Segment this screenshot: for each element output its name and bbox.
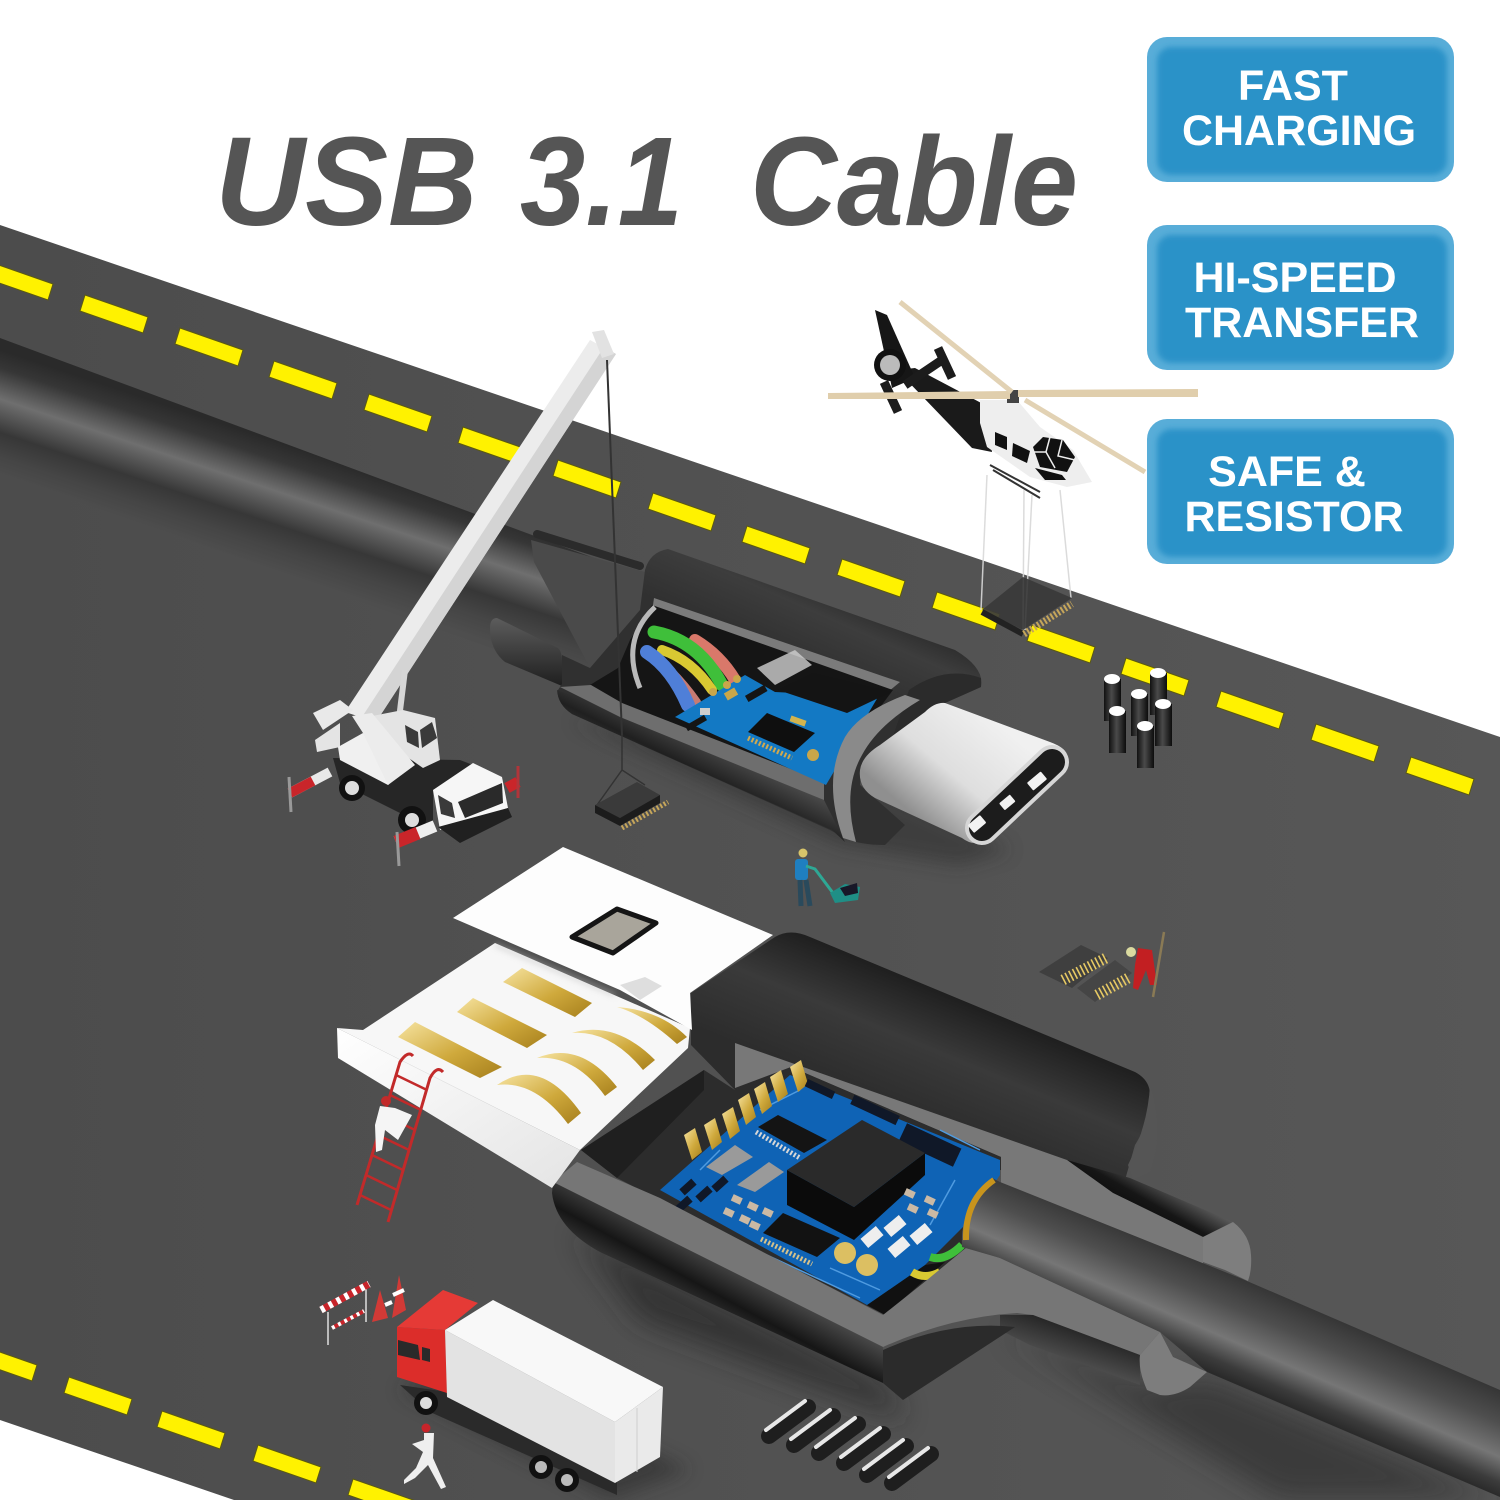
hoist rope (607, 360, 622, 735)
tail ring (874, 349, 906, 381)
operator cab windows (405, 725, 419, 748)
boom head (592, 330, 614, 358)
collar ring (833, 695, 920, 842)
cab top (397, 1290, 478, 1330)
curved contacts (497, 1075, 581, 1124)
white base top (337, 943, 690, 1150)
rotor hub (1007, 390, 1019, 403)
tail fin (875, 310, 915, 388)
rotor diagonal (900, 302, 1145, 472)
ladder with climber (357, 1054, 443, 1222)
small parts (685, 675, 819, 761)
opening (581, 1067, 1001, 1315)
collar end highlight (890, 674, 981, 745)
silver chip one (706, 1145, 753, 1175)
sling lines (981, 475, 1071, 630)
white pads (860, 1215, 933, 1258)
upper wall (735, 1043, 1203, 1270)
carried chip (982, 577, 1072, 630)
counterweight upper (313, 700, 353, 730)
ladder rungs (360, 1075, 427, 1210)
silver part (757, 650, 812, 685)
fuselage (980, 400, 1092, 487)
badge: fast charging: CHARGING (1182, 107, 1416, 155)
lower lobe (883, 1326, 1015, 1400)
box top (445, 1300, 663, 1422)
badge: fast charging: FAST (1238, 62, 1348, 110)
worker figure (1133, 948, 1157, 990)
wires end (930, 1245, 962, 1258)
cab window (398, 1340, 420, 1360)
truck shadow (400, 1360, 690, 1500)
cap slot (572, 909, 656, 953)
rear wheel (339, 775, 365, 801)
helicopter (828, 302, 1198, 634)
outrigger right (507, 782, 518, 788)
board traces (680, 1090, 980, 1298)
badge: hi-speed transfer: HI-SPEED (1193, 254, 1397, 302)
cockpit frames (1033, 437, 1075, 468)
back rail (537, 534, 640, 566)
dark components (675, 1079, 961, 1212)
usb type-a connector (552, 932, 1500, 1500)
plug contacts (968, 771, 1047, 833)
box side (445, 1330, 615, 1483)
chassis (400, 1385, 617, 1495)
badge: hi-speed transfer (1147, 225, 1454, 370)
upper channel (1067, 1160, 1233, 1237)
skid (990, 465, 1040, 498)
title: Cable (750, 111, 1078, 252)
lower right wedge (867, 1262, 945, 1315)
wires (647, 632, 735, 705)
box back (615, 1387, 663, 1483)
circuit board (675, 675, 878, 785)
ladder rails (357, 1054, 443, 1222)
lower rim (552, 1182, 883, 1383)
silver chip two (737, 1162, 784, 1192)
type-c connector (490, 534, 1067, 865)
top wall (652, 598, 900, 692)
hood end (1128, 1085, 1158, 1180)
front wheel (414, 1391, 438, 1415)
truck (397, 1290, 690, 1500)
circuit board (660, 1075, 1000, 1305)
crane boom (345, 340, 616, 722)
upper chip (758, 1115, 827, 1153)
pin row (748, 738, 792, 758)
back rail block (531, 540, 655, 668)
lower chip (763, 1213, 840, 1257)
cab side (397, 1327, 447, 1393)
windows (995, 432, 1075, 480)
badge: fast charging (1147, 37, 1454, 182)
stabilizers (884, 348, 952, 412)
road dashes: lower line (0, 1343, 416, 1500)
title: USB (215, 111, 478, 252)
crane (289, 330, 622, 866)
chips with worker (1039, 932, 1164, 1002)
paving worker (795, 848, 860, 906)
top cap (453, 847, 773, 1030)
inner block (581, 1070, 704, 1178)
road dashes: upper line (0, 262, 1474, 795)
badge: safe and resistor: RESISTOR (1184, 493, 1404, 541)
lift strut (397, 670, 405, 735)
upper end cap (1203, 1222, 1251, 1281)
turret block (338, 733, 400, 785)
front wheel (398, 806, 426, 834)
usb white shell (337, 847, 773, 1188)
cap shadow (495, 945, 615, 995)
barrier and cones (321, 1275, 406, 1345)
main cable (962, 1178, 1500, 1497)
bottom wall (560, 685, 824, 800)
white front face (337, 1028, 580, 1188)
lower ear (490, 618, 562, 686)
window interior (590, 605, 893, 782)
small pads (723, 1188, 939, 1231)
gold pins (684, 1060, 808, 1160)
seal arc (633, 607, 655, 688)
gold ring (966, 1180, 994, 1240)
walking worker (404, 1424, 446, 1489)
badge: safe and resistor: SAFE & (1208, 448, 1366, 496)
chassis (333, 758, 473, 827)
flat contacts (503, 968, 592, 1017)
top chip (778, 673, 891, 713)
lower channel (1000, 1315, 1140, 1385)
cones (392, 1275, 406, 1318)
lower end cap (1140, 1332, 1207, 1395)
title (215, 111, 1078, 252)
title: 3.1 (520, 111, 683, 252)
lower rim (557, 690, 845, 842)
barrier (328, 1285, 366, 1345)
large chip side (787, 1153, 925, 1240)
bottom wall (553, 1162, 1160, 1355)
rear wheels (529, 1455, 553, 1479)
badge: hi-speed transfer: TRANSFER (1185, 299, 1419, 347)
shadow under cable (1000, 1330, 1500, 1500)
hood (691, 932, 1150, 1180)
gold discs (834, 1242, 856, 1264)
truck cab (433, 763, 508, 830)
counterweight lower (315, 723, 340, 752)
connector silhouette (558, 549, 981, 845)
plug opening (982, 762, 1052, 828)
cap latch (620, 977, 662, 1000)
rotor horizontal (828, 391, 1010, 399)
connector shadow (570, 720, 1010, 865)
superstructure (367, 710, 440, 768)
plug shell (860, 703, 1067, 843)
shadow under connector (575, 1232, 905, 1420)
climber (375, 1106, 412, 1152)
large chip top (787, 1120, 925, 1207)
capacitor cluster (1104, 668, 1172, 768)
hanging chip (595, 735, 668, 828)
tail boom (897, 368, 992, 452)
outrigger left (290, 772, 330, 793)
upper cable (0, 338, 640, 700)
batteries (766, 1401, 931, 1483)
main chip (748, 713, 815, 752)
badge: safe and resistor (1147, 419, 1454, 564)
outrigger front (396, 826, 435, 842)
